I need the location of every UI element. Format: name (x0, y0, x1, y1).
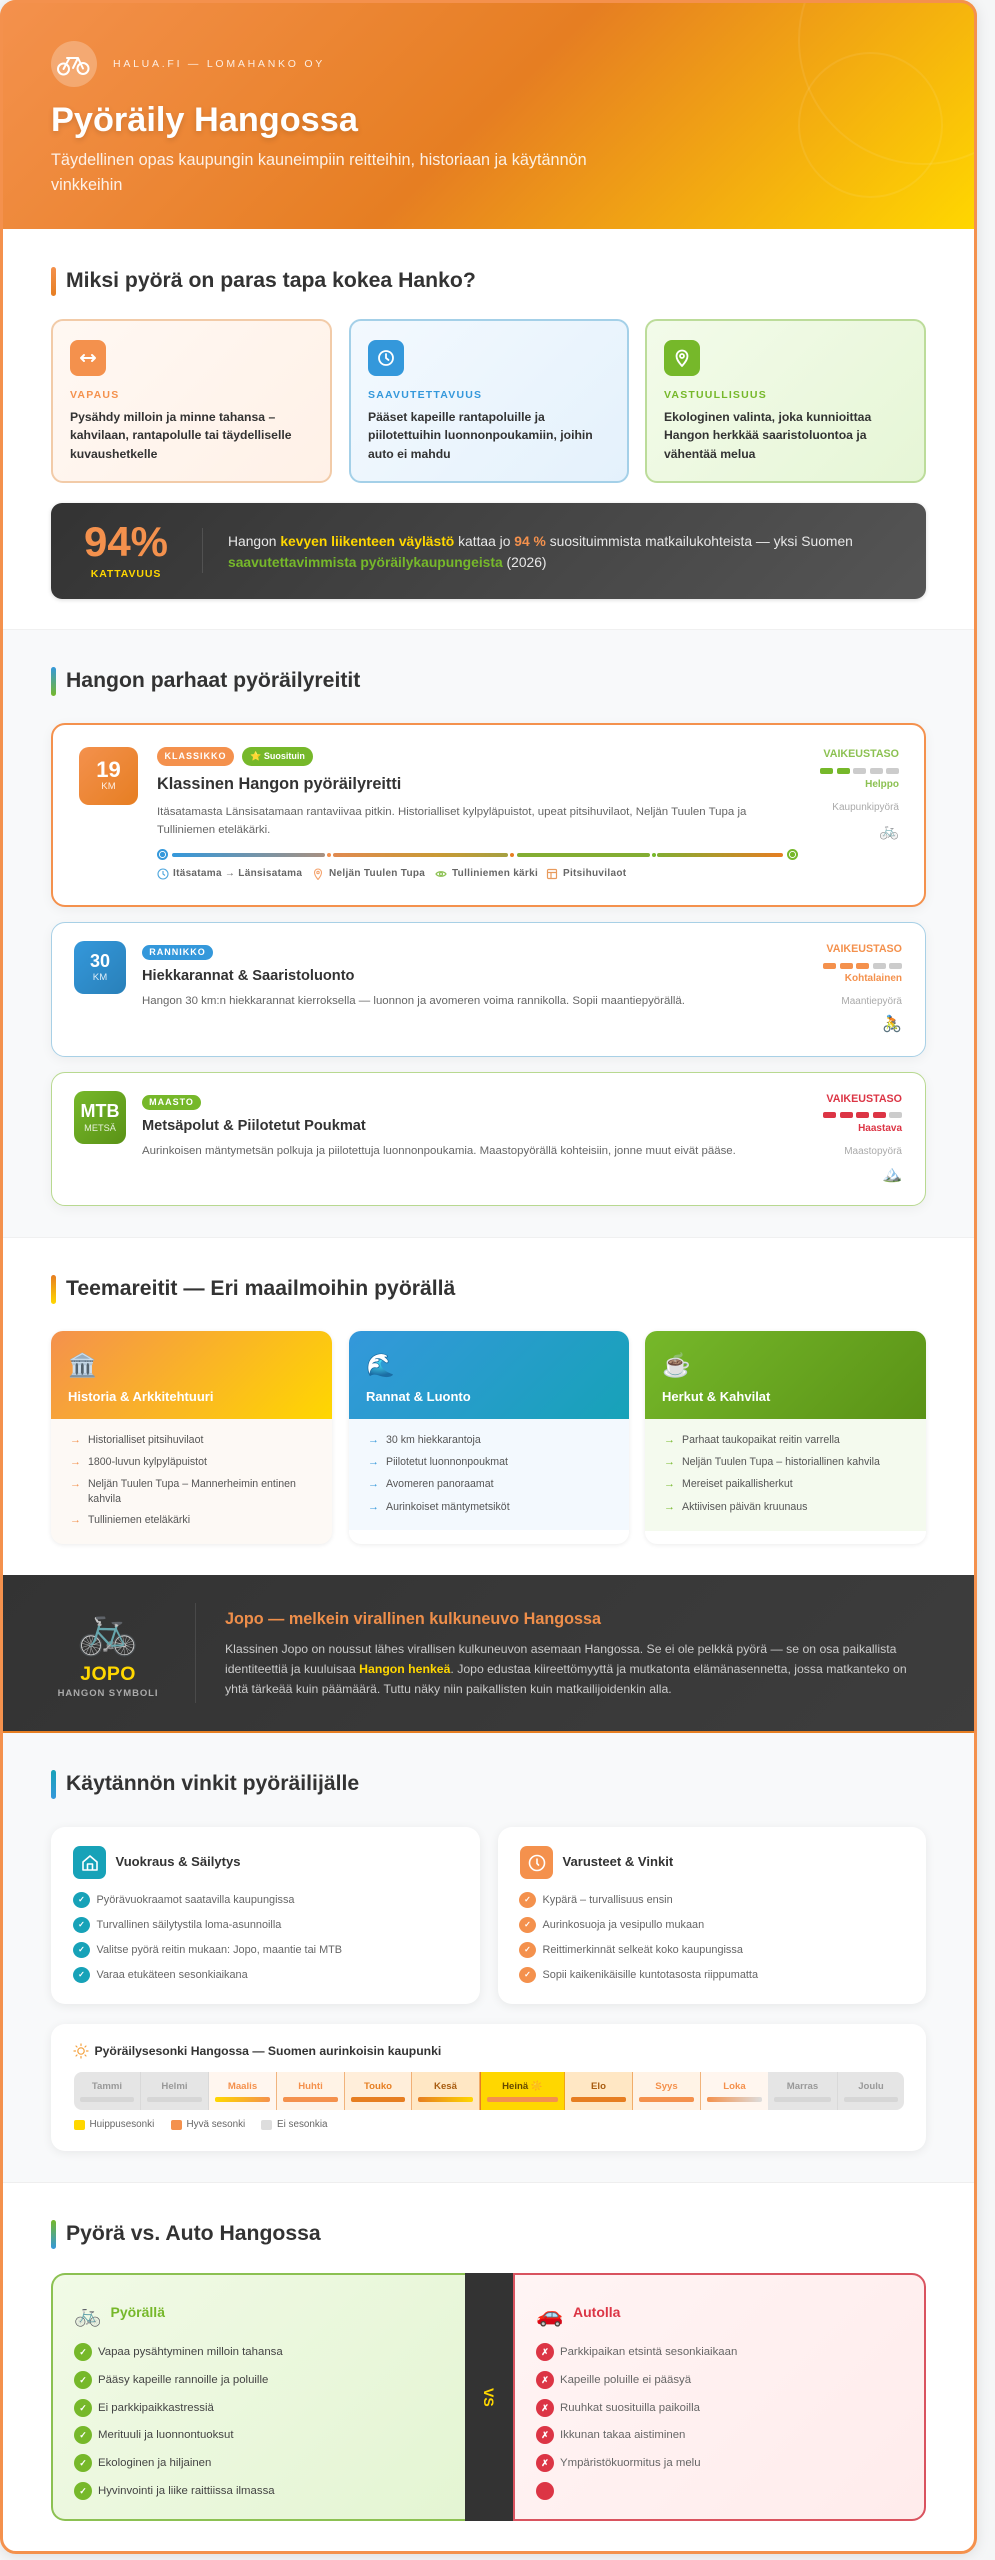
item: → (70, 1478, 81, 1490)
item: Pääsy kapeille rannoille ja poluille (98, 2374, 268, 2386)
item: kahvila (88, 1493, 121, 1505)
side title: Autolla (573, 2304, 620, 2320)
item: Kapeille poluille ei pääsyä (560, 2374, 691, 2386)
item: ✓ (79, 2375, 87, 2385)
month: huhti (277, 2072, 345, 2110)
month: maalis (209, 2072, 277, 2110)
item: Kypärä – turvallisuus ensin (542, 1894, 673, 1906)
tag: suosituin (242, 747, 313, 766)
icon: sun (73, 2043, 89, 2059)
item (536, 2344, 737, 2360)
section: why cycling (0, 229, 977, 629)
jopo body: Klassinen Jopo on noussut lähes virallisen kulkuneuvon asemaan Hangossa. Se ei ole pelkkä pyörä — se on osa paikallista (225, 1642, 896, 1656)
section: practical tips (0, 1733, 977, 2182)
difficulty value: Haastava (858, 1123, 902, 1134)
jopo body: yhtä tärkeää kuin päämäärä. Tuttu näky niin paikallisten kuin matkailijoidenkin alla. (225, 1682, 672, 1696)
item (74, 2483, 275, 2499)
item (536, 2455, 701, 2471)
icon: classical building: 🏛️ (68, 1352, 97, 1378)
difficulty bars (820, 768, 899, 774)
subtitle (51, 151, 587, 194)
season legend: Ei sesonkia (277, 2119, 328, 2130)
route legend (157, 868, 626, 880)
month: heina (480, 2072, 565, 2110)
icon: house (73, 1846, 106, 1879)
item: Hyvinvointi ja liike raittiissa ilmassa (98, 2485, 275, 2497)
stat banner (51, 503, 926, 599)
difficulty bars (823, 963, 902, 969)
month: joulu: Joulu (858, 2081, 884, 2092)
item: Valitse pyörä reitin mukaan: Jopo, maantie tai MTB (96, 1944, 342, 1956)
heading accent (51, 1770, 56, 1799)
month: elo (565, 2072, 633, 2110)
distance badge (79, 747, 138, 805)
month: touko (345, 2072, 412, 2110)
bike type: Maantiepyörä (841, 996, 902, 1007)
distance badge: KM (93, 972, 107, 983)
item: ✗ (541, 2375, 549, 2385)
item: ✗ (541, 2458, 549, 2468)
item: → (70, 1456, 81, 1468)
jopo heading: Jopo — melkein virallinen kulkuneuvo Hangossa (225, 1610, 601, 1628)
month: helmi (141, 2072, 209, 2110)
month: helmi: Helmi (161, 2081, 188, 2092)
item: ✓ (79, 2402, 87, 2412)
title: Pyöräily Hangossa (51, 101, 358, 139)
comparison: car (513, 2273, 926, 2521)
card title: Vuokraus & Säilytys (116, 1854, 240, 1869)
decorative circles (798, 0, 995, 165)
month: elo: Elo (591, 2081, 606, 2092)
icon: car: 🚗 (536, 2302, 563, 2327)
month: marras: Marras (787, 2081, 818, 2092)
month: huhti: Huhti (298, 2081, 323, 2092)
item: Historialliset pitsihuvilaot (88, 1434, 203, 1446)
difficulty heading: VAIKEUSTASO (826, 943, 902, 955)
bike type: Maastopyörä (844, 1146, 902, 1157)
difficulty column (823, 943, 902, 1033)
month: syys: Syys (655, 2081, 678, 2092)
stat number: 94% (84, 518, 168, 565)
empty item marker (536, 2483, 560, 2499)
item: → (664, 1478, 675, 1490)
text: piilotettuihin luonnonpoukamiin, joihin (368, 428, 593, 442)
item: Pyörävuokraamot saatavilla kaupungissa (96, 1894, 294, 1906)
month: loka (701, 2072, 768, 2110)
season legend (74, 2119, 328, 2130)
stat text: saavutettavimmista pyöräilykaupungeista (2026) (228, 554, 547, 570)
item: Turvallinen säilytystila loma-asunnoilla (96, 1919, 281, 1931)
tips card: gear (498, 1827, 926, 2004)
item: ✓ (78, 1970, 85, 1979)
heading accent (51, 2220, 56, 2249)
comparison: bike (51, 2273, 465, 2521)
route card: rannikko (51, 922, 926, 1057)
route legend: Tulliniemen kärki (452, 868, 538, 879)
jopo body (225, 1642, 907, 1696)
item: Varaa etukäteen sesonkiaikana (96, 1969, 248, 1981)
item: Tulliniemen eteläkärki (88, 1514, 190, 1526)
label: SAAVUTETTAVUUS (368, 389, 482, 401)
item: Mereiset paikallisherkut (682, 1478, 793, 1490)
text (368, 410, 593, 461)
item: ✗ (541, 2430, 549, 2440)
route description: Aurinkoisen mäntymetsän polkuja ja piilotettuja luonnonpoukamia. Maastopyörällä kohteisiin, jonne muut eivät pääse. (142, 1145, 736, 1157)
section: bike vs car (0, 2182, 977, 2554)
header (0, 0, 977, 229)
jopo body: identiteettiä ja kuuluisaa Hangon henkeä. Jopo edustaa kiireettömyyttä ja mutkatonta elämänasennetta, jossa matkanteko on (225, 1662, 907, 1676)
theme list (645, 1419, 926, 1531)
route card: klassikko (51, 723, 926, 907)
text: vähentää melua (664, 447, 755, 461)
item: ✓ (79, 2347, 87, 2357)
route description: Tulliniemen eteläkärki. (157, 824, 270, 836)
tag: maasto: MAASTO (149, 1097, 194, 1107)
theme title: Rannat & Luonto (366, 1389, 471, 1404)
icon: mountain: 🏔️ (882, 1166, 902, 1183)
month: loka: Loka (723, 2081, 746, 2092)
tag: klassikko: KLASSIKKO (164, 751, 226, 761)
theme card: history (51, 1331, 332, 1544)
item: Vapaa pysähtyminen milloin tahansa (98, 2346, 283, 2358)
item (536, 2427, 685, 2443)
theme title: Historia & Arkkitehtuuri (68, 1389, 213, 1404)
icon: clock (368, 340, 404, 376)
jopo divider (195, 1603, 196, 1703)
heading accent (51, 1275, 56, 1304)
card: saavutettavuus (349, 319, 629, 483)
tag: maasto (142, 1095, 201, 1110)
difficulty column (823, 1093, 902, 1183)
route title: Metsäpolut & Piilotetut Poukmat (142, 1118, 366, 1134)
month: marras (768, 2072, 838, 2110)
subtitle: Täydellinen opas kaupungin kauneimpiin reitteihin, historiaan ja käytännön (51, 151, 587, 169)
card title: Varusteet & Vinkit (562, 1854, 673, 1869)
difficulty value: Helppo (865, 779, 899, 790)
icon: arrows (70, 340, 106, 376)
tag: suosituin: ⭐ Suosituin (250, 751, 305, 761)
item (519, 1942, 743, 1958)
route card: maasto (51, 1072, 926, 1206)
icon: clock (520, 1846, 553, 1879)
season legend: Hyvä sesonki (186, 2119, 245, 2130)
route legend: Itäsatama → Länsisatama (173, 868, 302, 879)
route description: Itäsatamasta Länsisatamaan rantaviivaa pitkin. Historialliset kylpyläpuistot, upeat pitsihuvilaot, Neljän Tuulen Tupa ja (157, 806, 746, 818)
icon: bicycle: 🚲 (74, 2302, 101, 2327)
icon: wave: 🌊 (366, 1352, 395, 1378)
text: Pysähdy milloin ja minne tahansa – (70, 410, 275, 424)
distance badge: 30 (90, 951, 110, 971)
route line (157, 849, 798, 860)
item (536, 2400, 700, 2416)
difficulty heading: VAIKEUSTASO (826, 1093, 902, 1105)
item: ✓ (78, 1945, 85, 1954)
item (519, 1892, 673, 1908)
item: ✓ (524, 1970, 531, 1979)
item: → (368, 1478, 379, 1490)
stat divider (202, 528, 203, 573)
jopo subtitle: HANGON SYMBOLI (58, 1688, 158, 1699)
item (74, 2343, 283, 2361)
card: vapaus (51, 319, 332, 483)
text (70, 410, 292, 461)
theme header (51, 1331, 332, 1419)
label: VAPAUS (70, 389, 119, 401)
icon: bicycle: 🚲 (879, 823, 899, 840)
heading: Pyörä vs. Auto Hangossa (66, 2222, 321, 2245)
item: → (664, 1501, 675, 1513)
theme card: beaches (349, 1331, 629, 1544)
item: Neljän Tuulen Tupa – Mannerheimin entinen (88, 1478, 296, 1490)
difficulty column (820, 748, 899, 840)
difficulty value: Kohtalainen (845, 973, 902, 984)
stat text (228, 532, 853, 570)
icon: bicycle logo (51, 41, 97, 87)
item: Ei parkkipaikkastressiä (98, 2402, 214, 2414)
theme title: Herkut & Kahvilat (662, 1389, 770, 1404)
item: Sopii kaikenikäisille kuntotasosta riippumatta (542, 1969, 758, 1981)
item: 30 km hiekkarantoja (386, 1434, 481, 1446)
route description: Hangon 30 km:n hiekkarannat kierroksella — luonnon ja avomeren voima rannikolla. Sopii maantiepyörällä. (142, 995, 685, 1007)
heading: Teemareitit — Eri maailmoihin pyörällä (66, 1277, 455, 1300)
item: Aurinkosuoja ja vesipullo mukaan (542, 1919, 704, 1931)
side title: Pyörällä (110, 2304, 165, 2320)
theme list (70, 1434, 296, 1526)
month: tammi (74, 2072, 141, 2110)
item: Ruuhkat suosituilla paikoilla (560, 2402, 700, 2414)
heading accent (51, 267, 56, 296)
item: Aktiivisen päivän kruunaus (682, 1501, 807, 1513)
tips card: rental (51, 1827, 480, 2004)
tag: rannikko: RANNIKKO (149, 947, 206, 957)
month: syys (633, 2072, 701, 2110)
route legend: Pitsihuvilaot (563, 868, 626, 879)
theme header (349, 1331, 629, 1419)
item: ✓ (524, 1895, 531, 1904)
item: Parkkipaikan etsintä sesonkiaikaan (560, 2346, 737, 2358)
item (519, 1967, 758, 1983)
distance badge (74, 941, 126, 994)
item: ✓ (524, 1945, 531, 1954)
text: auto ei mahdu (368, 447, 451, 461)
item: → (664, 1456, 675, 1468)
month: heina: Heinä ☀ (502, 2081, 543, 2092)
item: ✗ (541, 2402, 549, 2412)
route title: Klassinen Hangon pyöräilyreitti (157, 775, 401, 793)
distance badge: 19 (96, 757, 121, 782)
item (73, 1892, 294, 1908)
icon: map pin (664, 340, 700, 376)
vs label: VS (481, 2388, 497, 2406)
heading accent (51, 667, 56, 696)
item: ✓ (79, 2486, 87, 2496)
item: Reittimerkinnät selkeät koko kaupungissa (542, 1944, 743, 1956)
item (70, 1478, 296, 1505)
tag: klassikko (157, 747, 234, 766)
item: Aurinkoiset mäntymetsiköt (386, 1501, 510, 1513)
stat text: Hangon kevyen liikenteen väylästö kattaa jo 94 % suosituimmista matkailukohteista — yksi Suomen (228, 532, 853, 548)
icon: cyclist: 🚴 (882, 1016, 902, 1033)
text: Hangon herkkää saaristoluontoa ja (664, 428, 867, 442)
icon: jopo bicycle: 🚲 (77, 1601, 139, 1657)
item: Piilotetut luonnonpoukmat (386, 1456, 508, 1468)
text: kahvilaan, rantapolulle tai täydelliselle (70, 428, 292, 442)
month: tammi: Tammi (92, 2081, 122, 2092)
item: ✗ (541, 2347, 549, 2357)
season title: Pyöräilysesonki Hangossa — Suomen aurinkoisin kaupunki (94, 2044, 441, 2058)
item: Ekologinen ja hiljainen (98, 2457, 211, 2469)
item: → (368, 1501, 379, 1513)
heading: Käytännön vinkit pyöräilijälle (66, 1772, 359, 1795)
item (74, 2455, 211, 2471)
route legend: Neljän Tuulen Tupa (329, 868, 425, 879)
difficulty bars (823, 1112, 902, 1118)
distance badge: MTB (80, 1101, 120, 1121)
item: Merituuli ja luonnontuoksut (98, 2429, 234, 2441)
item: → (70, 1514, 81, 1526)
item: → (70, 1434, 81, 1446)
item: ✓ (78, 1895, 85, 1904)
theme list (349, 1419, 629, 1530)
comparison: vs (465, 2273, 513, 2521)
item (536, 2372, 691, 2388)
jopo name: JOPO (80, 1663, 136, 1685)
card: vastuullisuus (645, 319, 926, 483)
text: Pääset kapeille rantapoluille ja (368, 410, 545, 424)
tag: rannikko (142, 945, 213, 960)
item: Neljän Tuulen Tupa – historiallinen kahvila (682, 1456, 880, 1468)
item (74, 2400, 214, 2416)
item (74, 2372, 268, 2388)
difficulty heading: VAIKEUSTASO (823, 748, 899, 760)
month: kesa (412, 2072, 480, 2110)
item (519, 1917, 704, 1933)
month: maalis: Maalis (228, 2081, 257, 2092)
item: ✓ (79, 2430, 87, 2440)
item: ✓ (524, 1920, 531, 1929)
item: Ikkunan takaa aistiminen (560, 2429, 685, 2441)
section: jopo banner (0, 1575, 977, 1733)
heading: Miksi pyörä on paras tapa kokea Hanko? (66, 269, 476, 292)
heading: Hangon parhaat pyöräilyreitit (66, 669, 360, 692)
item: Avomeren panoraamat (386, 1478, 494, 1490)
theme header (645, 1331, 926, 1419)
route title: Hiekkarannat & Saaristoluonto (142, 968, 354, 984)
item: ✓ (78, 1920, 85, 1929)
label: VASTUULLISUUS (664, 389, 767, 401)
subtitle: vinkkeihin (51, 176, 122, 194)
item: → (664, 1434, 675, 1446)
item (73, 1967, 248, 1983)
item: 1800-luvun kylpyläpuistot (88, 1456, 207, 1468)
season legend: Huippusesonki (90, 2119, 154, 2130)
text: Ekologinen valinta, joka kunnioittaa (664, 410, 871, 424)
month strip (74, 2072, 904, 2110)
month: touko: Touko (364, 2081, 392, 2092)
distance badge: METSÄ (84, 1123, 116, 1133)
distance badge (74, 1091, 126, 1144)
stat label: KATTAVUUS (91, 568, 161, 580)
month: kesa: Kesä (434, 2081, 457, 2092)
item (73, 1942, 342, 1958)
item: ✓ (79, 2458, 87, 2468)
icon: coffee: ☕ (662, 1352, 691, 1378)
item (73, 1917, 282, 1933)
item: Parhaat taukopaikat reitin varrella (682, 1434, 840, 1446)
theme card: treats (645, 1331, 926, 1544)
season card (51, 2024, 926, 2151)
brand line: HALUA.FI — LOMAHANKO OY (113, 58, 325, 70)
distance badge: KM (101, 781, 116, 792)
text (664, 410, 872, 461)
item: Ympäristökuormitus ja melu (560, 2457, 701, 2469)
item: → (368, 1434, 379, 1446)
item: → (368, 1456, 379, 1468)
month: joulu (838, 2072, 904, 2110)
item (74, 2427, 234, 2443)
bike type: Kaupunkipyörä (832, 802, 899, 813)
text: kuvaushetkelle (70, 447, 157, 461)
section: best routes (0, 629, 977, 1237)
route description (157, 806, 746, 836)
section: theme routes (0, 1237, 977, 1575)
